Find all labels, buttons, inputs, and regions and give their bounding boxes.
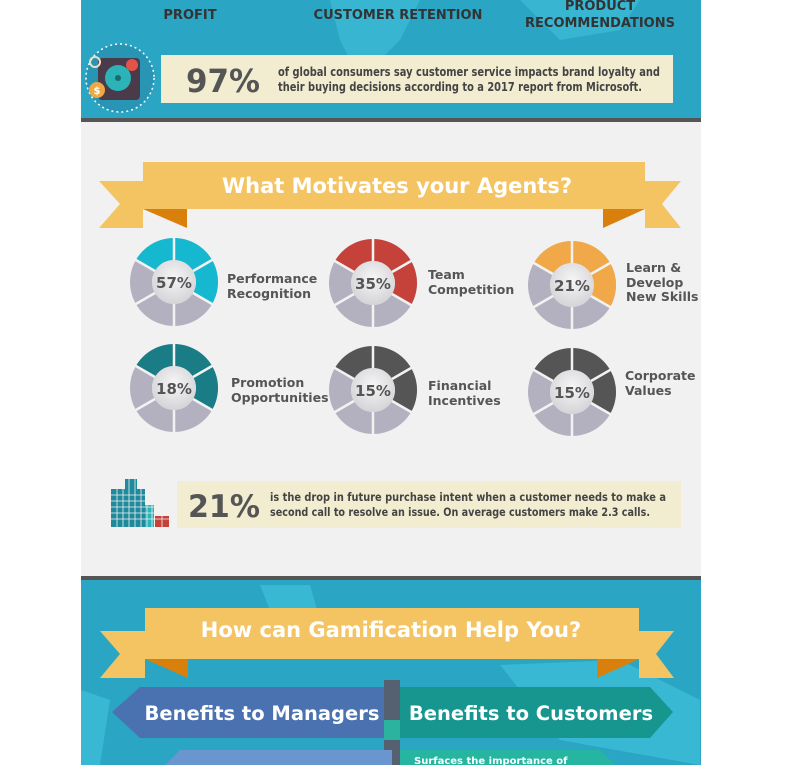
top blue section <box>81 0 701 122</box>
top labels: CUSTOMER RETENTION <box>314 8 482 23</box>
donut: 57% Performance Recognition <box>129 237 317 327</box>
donut: 21% Learn & Develop <box>527 240 698 330</box>
callout 21% <box>177 481 681 528</box>
donut: 35% Team Competition: Team <box>428 267 465 282</box>
next row arrows <box>165 750 615 767</box>
donut: 15% Financial <box>328 345 501 435</box>
callout 97%: 97% <box>186 62 260 100</box>
callout 97% <box>161 55 673 103</box>
donut: 15% Corporate Values: Corporate <box>625 368 696 383</box>
callout 21%: 21% <box>188 489 260 525</box>
callout 97%: of global consumers say customer service impacts brand loyalty and <box>278 65 660 79</box>
heading ribbon: Gamification <box>100 608 674 678</box>
callout 21%: second call to resolve an issue. On average customers make 2.3 calls. <box>270 505 650 519</box>
callout 21%: is the drop in future purchase intent when a customer needs to make a <box>270 490 666 504</box>
donut: 21% Learn & Develop: Develop <box>626 275 683 290</box>
heading ribbon: Gamification: How can Gamification Help You? <box>201 618 581 642</box>
signpost <box>384 680 400 765</box>
donut: 15% Corporate Values <box>527 347 696 437</box>
donut: 21% Learn & Develop: New Skills <box>626 289 698 304</box>
donut: 35% Team Competition <box>328 238 514 328</box>
donut: 15% Financial: Financial <box>428 378 491 393</box>
donut: 15% Financial: Incentives <box>428 393 501 408</box>
donut: 57% Performance Recognition: Recognition <box>227 286 311 301</box>
arrow: Benefits to Managers <box>112 687 384 738</box>
icon: safe <box>86 44 154 112</box>
donut: 15% Corporate Values: 15% <box>554 384 590 402</box>
heading ribbon: What Motivates <box>99 162 681 228</box>
donut: 21% Learn & Develop: 21% <box>554 277 590 295</box>
donut: 18% Promotion: 18% <box>156 380 192 398</box>
arrow: Benefits to Customers: Benefits to Customers <box>409 702 653 725</box>
bottom blue section <box>81 580 701 765</box>
donut: 21% Learn & Develop: Learn & <box>626 260 681 275</box>
arrow: Benefits to Customers <box>400 687 673 738</box>
heading ribbon: What Motivates: What Motivates your Agents? <box>222 174 572 198</box>
callout 97%: their buying decisions according to a 2017 report from Microsoft. <box>278 80 642 94</box>
donut: 35% Team Competition: 35% <box>355 275 391 293</box>
top labels: PROFIT <box>163 8 217 23</box>
icon: safe: $ <box>94 86 101 97</box>
top labels <box>163 0 675 31</box>
icon: bar blocks <box>111 479 169 527</box>
donut: 15% Financial: 15% <box>355 382 391 400</box>
donut: 57% Performance Recognition: Performance <box>227 271 317 286</box>
gray section <box>81 122 701 580</box>
donut: 18% Promotion <box>129 343 329 433</box>
donut: 57% Performance Recognition: 57% <box>156 274 192 292</box>
donut: 35% Team Competition: Competition <box>428 282 514 297</box>
arrow: Benefits to Managers: Benefits to Managers <box>145 702 379 725</box>
top labels: RECOMMENDATIONS <box>525 16 675 31</box>
donut: 18% Promotion: Promotion <box>231 375 304 390</box>
donut: 15% Corporate Values: Values <box>625 383 672 398</box>
donut: 18% Promotion: Opportunities <box>231 390 329 405</box>
